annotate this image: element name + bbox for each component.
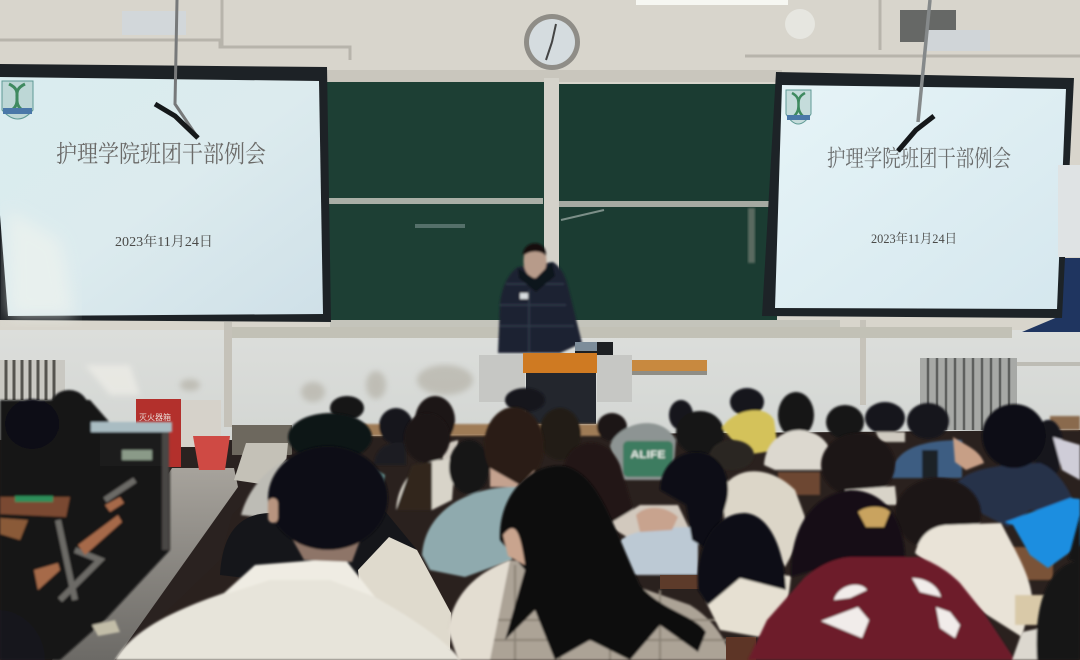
red bin	[193, 436, 230, 470]
girl with cream hood	[895, 478, 1050, 637]
left screen date: 2023年11月24日	[115, 233, 213, 249]
front row students	[115, 446, 1080, 660]
long-haired girl with plaid coat	[448, 466, 733, 660]
fire safety poster	[181, 400, 221, 447]
cabinet label: 灭火器箱	[139, 412, 171, 422]
left desks and students	[0, 390, 172, 660]
middle row students	[241, 404, 1080, 577]
right radiator	[920, 358, 1017, 430]
wall skirting	[232, 425, 292, 455]
logo: right	[786, 90, 811, 124]
girl in maroon hoodie	[748, 490, 1015, 660]
ceiling light	[636, 0, 788, 5]
left radiator	[0, 360, 65, 400]
wall notice	[1058, 165, 1080, 257]
smoke detector	[785, 9, 815, 39]
red cabinet	[136, 399, 181, 467]
right screen date: 2023年11月24日	[871, 231, 957, 246]
top rails	[0, 0, 1080, 60]
far-right student	[1012, 515, 1080, 660]
backpack lettering: ALIFE	[630, 449, 666, 461]
back bench and bags	[330, 388, 1080, 580]
aisle floor	[52, 468, 238, 660]
white-collar girl	[698, 513, 791, 637]
right screen title: 护理学院班团干部例会	[827, 146, 1011, 171]
dark student, front-left	[220, 505, 417, 582]
right projector	[898, 0, 990, 151]
audience base	[116, 430, 1080, 660]
left projector	[122, 0, 198, 138]
wall clock	[524, 14, 580, 70]
desk at right	[726, 637, 756, 660]
upper wall	[0, 0, 1080, 340]
blackboard group	[232, 70, 1012, 338]
logo: left	[2, 81, 33, 119]
left screen title: 护理学院班团干部例会	[56, 141, 266, 168]
floor mat	[234, 443, 288, 485]
front boy	[115, 446, 461, 660]
white fluffy jacket student	[358, 537, 451, 650]
lectern	[479, 342, 707, 424]
left projection screen	[0, 64, 331, 322]
teacher	[498, 243, 582, 353]
right projection screen	[762, 72, 1080, 332]
lower wall	[0, 330, 1080, 440]
